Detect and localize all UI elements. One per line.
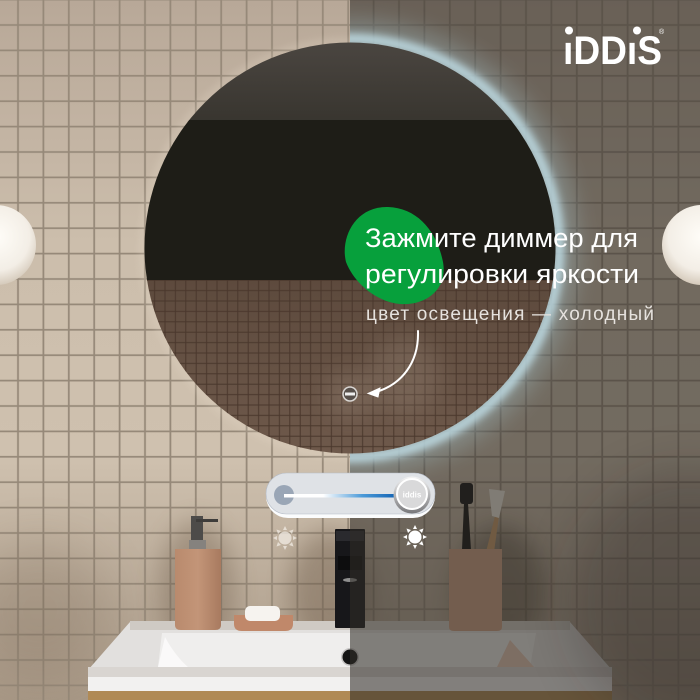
sink cabinet wood <box>88 691 612 700</box>
toothbrushes <box>460 483 505 552</box>
soap dish <box>234 606 293 631</box>
heading: регулировки яркости <box>365 259 639 289</box>
soap dispenser <box>175 516 221 630</box>
icon: dim sun <box>273 526 297 550</box>
faucet <box>335 529 365 628</box>
washbasin <box>88 621 612 691</box>
brand logo: ® <box>659 28 665 36</box>
brand logo: ıDDıS <box>563 29 662 73</box>
dimmer slider panel <box>266 473 435 518</box>
cool half darkening overlay <box>350 0 700 700</box>
cool backlight glow <box>350 12 587 474</box>
lamp: left <box>0 205 36 285</box>
lamp: right <box>662 205 700 285</box>
drain <box>341 648 359 666</box>
round mirror <box>140 40 560 455</box>
slider start dot <box>274 485 294 505</box>
mirror dimmer touch button <box>343 387 357 401</box>
icon: bright sun <box>403 525 427 549</box>
subheading: цвет освещения — холодный <box>366 304 654 325</box>
toothbrush cup <box>449 549 502 631</box>
slider track <box>284 494 396 498</box>
heading: Зажмите диммер для <box>365 223 638 253</box>
warm backlight glow <box>139 37 350 460</box>
slider knob: iddis <box>403 490 422 500</box>
green accent blob <box>345 207 444 304</box>
heading <box>365 223 639 289</box>
arrow to dimmer button <box>368 331 418 397</box>
slider knob <box>394 476 430 514</box>
